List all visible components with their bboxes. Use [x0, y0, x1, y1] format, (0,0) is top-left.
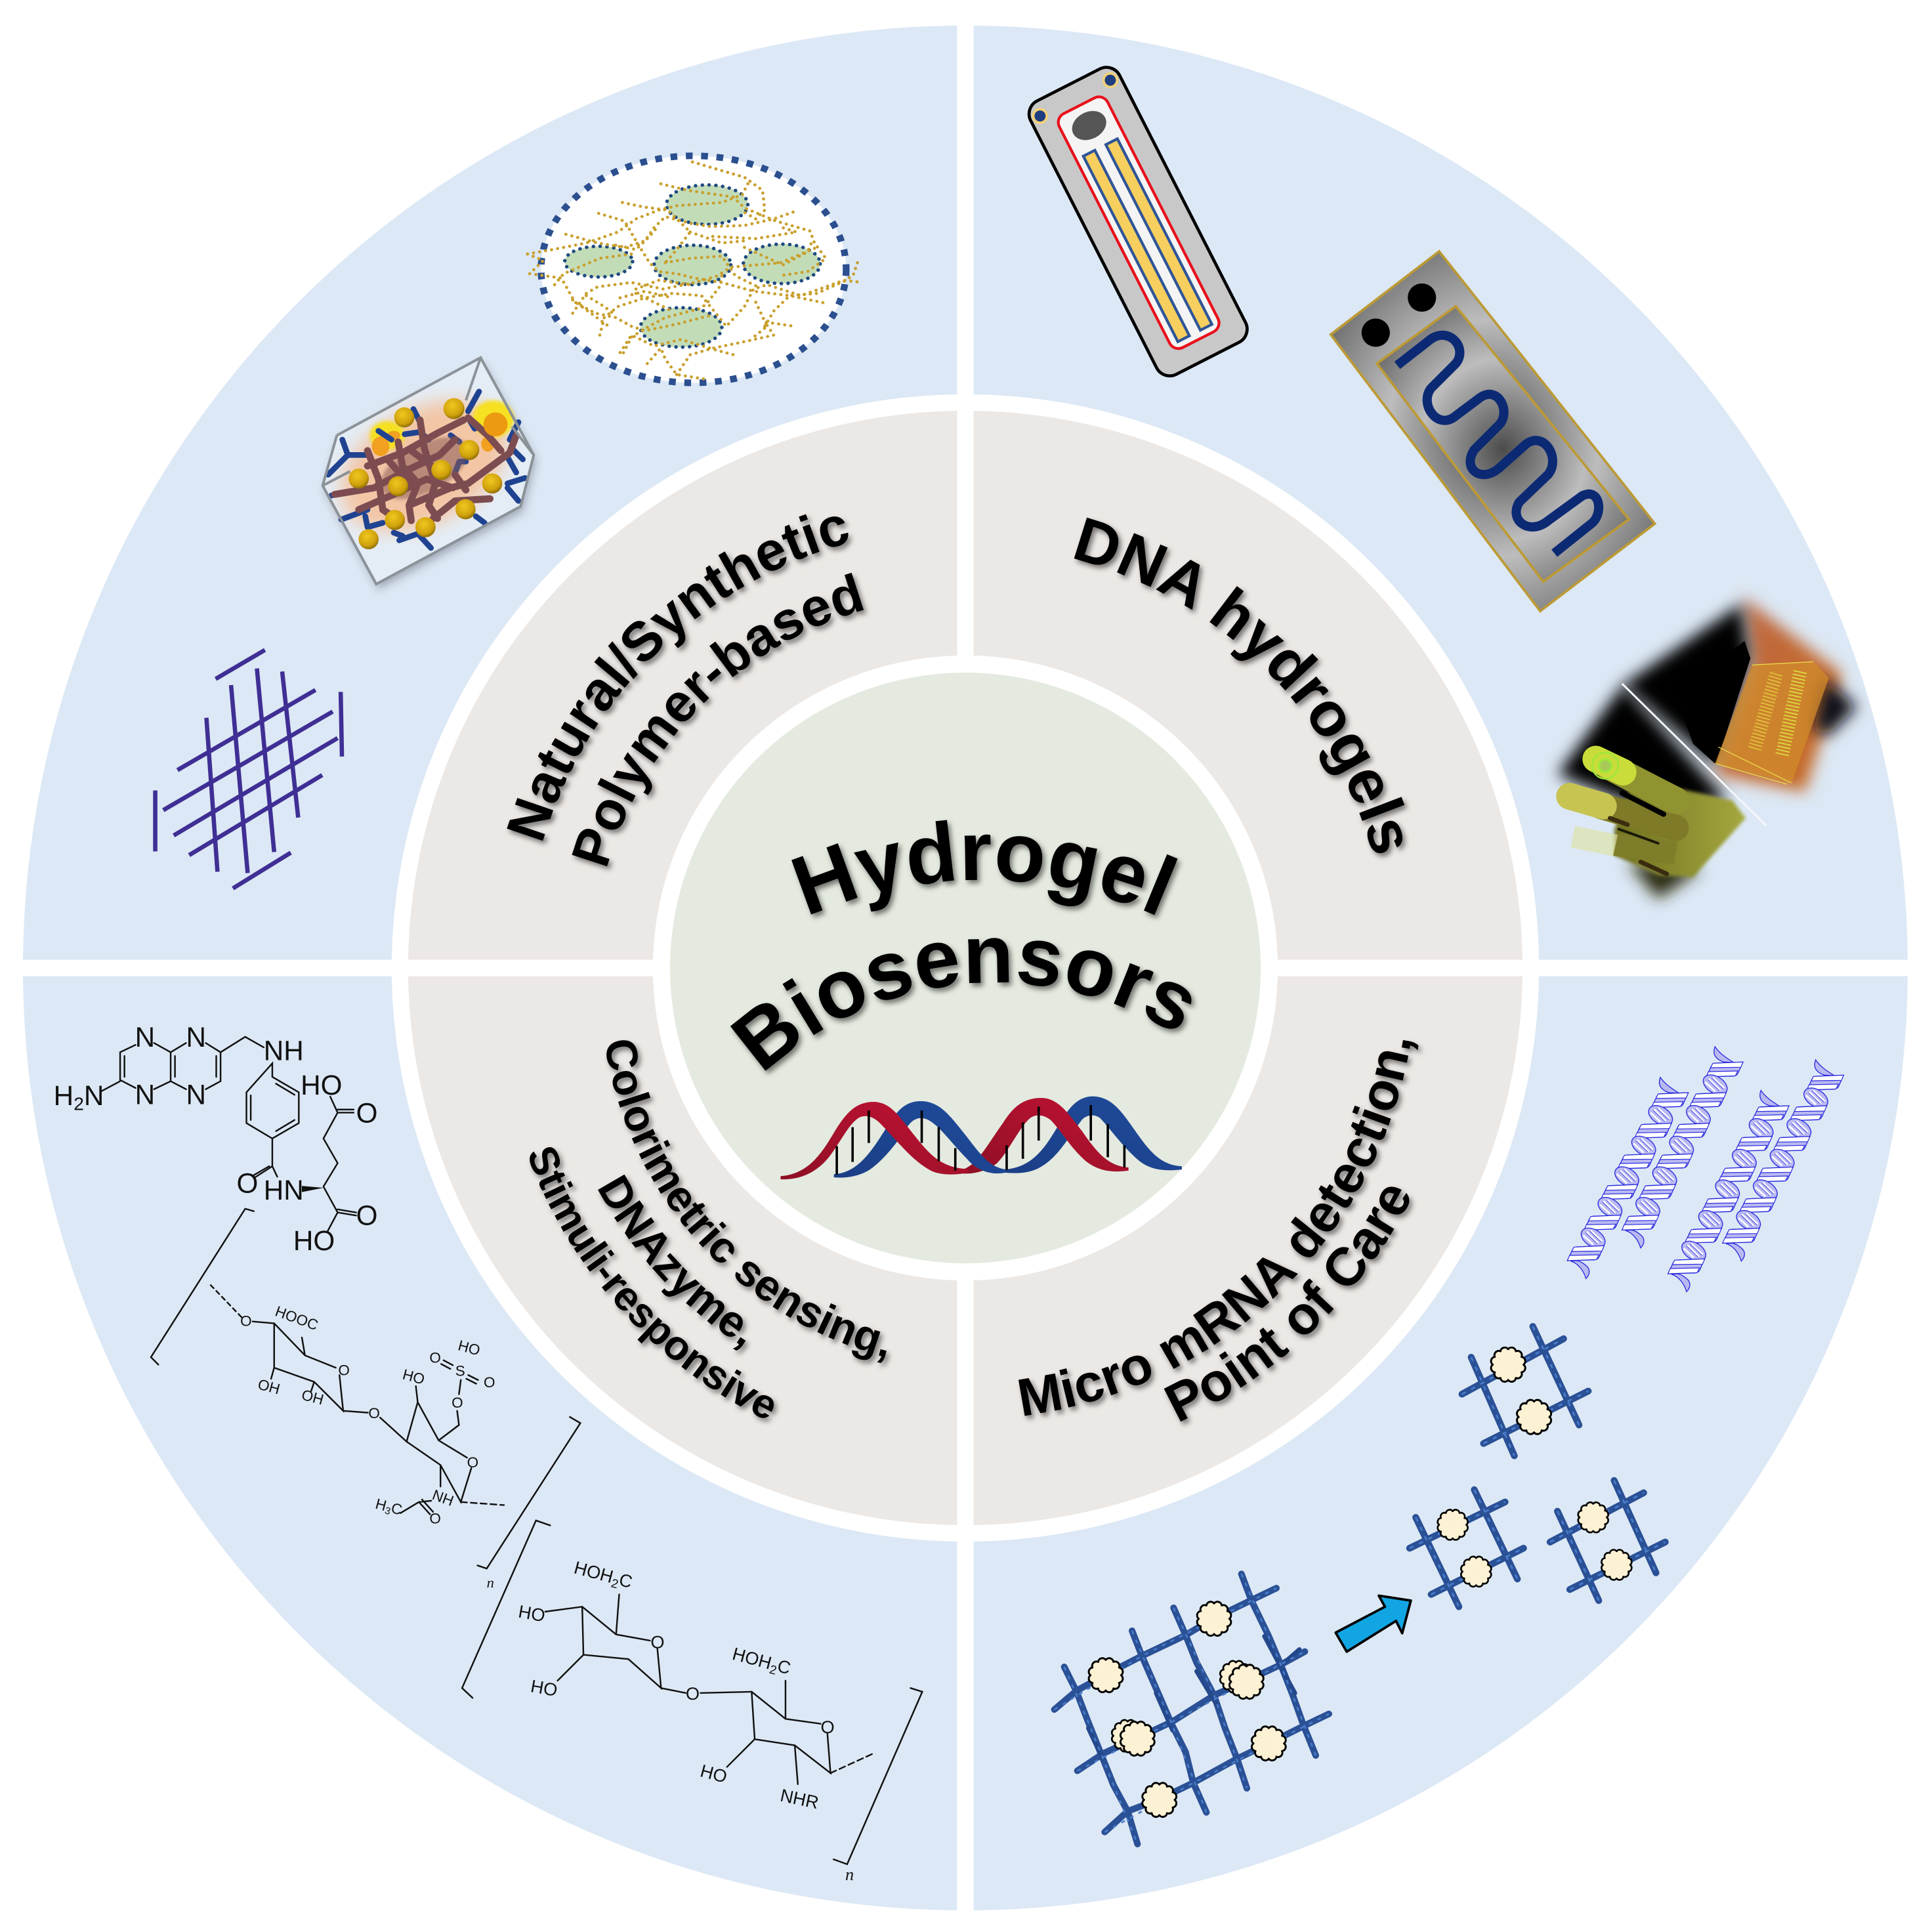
illustration: glycosaminoglycan chemical structure: HOOC	[273, 1303, 320, 1334]
illustration: folic acid chemical structure	[54, 1022, 377, 1256]
illustration: chitosan chemical structure: O	[650, 1631, 665, 1652]
illustration: chitosan chemical structure: 2	[610, 1576, 620, 1591]
illustration: folic acid chemical structure: O	[356, 1200, 377, 1230]
label: Colorimetric sensing, DNAzyme, Stimuli-responsive: DNAzyme,	[598, 1175, 751, 1356]
illustration: chitosan chemical structure: C	[617, 1569, 635, 1592]
label: Natural/Synthetic Polymer-based: Polymer-based	[572, 572, 869, 872]
arrow: lattice breakdown	[1335, 1595, 1411, 1652]
illustration: chitosan chemical structure	[462, 1521, 922, 1884]
panel: inner ring DNA hydrogels	[974, 411, 1522, 959]
illustration: glycosaminoglycan chemical structure: O	[429, 1511, 441, 1527]
illustration: serpentine electrode chip	[1331, 251, 1655, 611]
illustration: folic acid chemical structure: O	[356, 1097, 377, 1128]
label: Micro mRNA detection, Point of Care: Point of Care	[1164, 1186, 1415, 1427]
label: Colorimetric sensing, DNAzyme, Stimuli-responsive: Stimuli-responsive	[529, 1147, 780, 1425]
illustration: blue DNA double strands	[1567, 1047, 1843, 1292]
panel: central circle	[670, 673, 1261, 1263]
panel: inner ring natural synthetic polymer	[408, 411, 957, 959]
illustration: folic acid chemical structure: O	[236, 1167, 258, 1198]
illustration: folic acid chemical structure: N	[135, 1022, 155, 1053]
label: Natural/Synthetic Polymer-based: Natural/Synthetic	[507, 514, 854, 847]
illustration: glycosaminoglycan chemical structure: O	[429, 1350, 441, 1366]
illustration: chitosan chemical structure: HO	[517, 1601, 547, 1626]
illustration: glycosaminoglycan chemical structure: OH	[256, 1376, 282, 1398]
illustration: glycosaminoglycan chemical structure: H	[373, 1496, 388, 1514]
illustration: glycosaminoglycan chemical structure: n	[487, 1574, 494, 1591]
icon: DNA double helix	[781, 1098, 1182, 1178]
illustration: dotted micelle network circle	[528, 156, 862, 383]
illustration: glycosaminoglycan chemical structure: O	[368, 1405, 380, 1421]
illustration: chitosan chemical structure: 2	[768, 1662, 778, 1677]
illustration: glycosaminoglycan chemical structure: O	[338, 1362, 350, 1378]
panel: inner ring micro mRNA	[974, 976, 1522, 1525]
label: Micro mRNA detection, Point of Care: Micro mRNA detection,	[1018, 1040, 1424, 1422]
illustration: folic acid chemical structure: N	[135, 1079, 155, 1110]
illustration: glycosaminoglycan chemical structure: 3	[383, 1505, 392, 1517]
illustration: glycosaminoglycan chemical structure: O	[484, 1374, 495, 1391]
illustration: glycosaminoglycan chemical structure: C	[389, 1500, 404, 1519]
illustration: glycosaminoglycan chemical structure: HO	[456, 1337, 482, 1358]
panel: mRNA and point of care quadrant background	[974, 976, 1908, 1910]
illustration: chitosan chemical structure: HO	[529, 1675, 559, 1700]
title: Hydrogel Biosensors	[730, 820, 1197, 1076]
illustration: chitosan chemical structure: C	[775, 1655, 793, 1678]
illustration: chitosan chemical structure: HOH	[572, 1557, 616, 1587]
illustration: folic acid chemical structure: N	[186, 1079, 206, 1110]
illustration: folic acid chemical structure: N	[84, 1080, 104, 1111]
panel: DNA hydrogel devices quadrant background	[974, 26, 1908, 959]
illustration: chitosan chemical structure: O	[820, 1717, 835, 1737]
illustration: small hydrogel lattice top	[1462, 1326, 1588, 1456]
illustration: chitosan chemical structure: HOH	[730, 1643, 774, 1673]
illustration: folic acid chemical structure: HO	[293, 1225, 335, 1256]
illustration: large hydrogel lattice with cargo	[1055, 1574, 1329, 1844]
title: Hydrogel Biosensors: Biosensors	[730, 938, 1197, 1076]
label: DNA hydrogels: DNA hydrogels	[1074, 517, 1410, 860]
illustration: chitosan chemical structure: O	[686, 1683, 700, 1704]
panel: polymer materials quadrant background	[23, 26, 957, 959]
illustration: gray electrode strip sensor	[1024, 62, 1252, 381]
illustration: folic acid chemical structure: H	[54, 1080, 74, 1111]
illustration: glycosaminoglycan chemical structure: O	[467, 1454, 478, 1471]
illustration: folic acid chemical structure: HN	[264, 1175, 304, 1206]
label: Colorimetric sensing, DNAzyme, Stimuli-responsive	[529, 1040, 892, 1425]
illustration: glycosaminoglycan chemical structure: HO	[401, 1366, 427, 1388]
illustration: folic acid chemical structure: 2	[74, 1094, 84, 1114]
illustration: folic acid chemical structure: N	[186, 1022, 206, 1053]
illustration: folic acid chemical structure: HO	[301, 1070, 342, 1101]
illustration: chitosan chemical structure: HO	[698, 1760, 729, 1787]
illustration: small hydrogel lattice middle	[1410, 1490, 1524, 1606]
panel: chemical structures quadrant background	[23, 976, 957, 1910]
illustration: purple crosslinked grid	[156, 650, 342, 889]
illustration: hydrogel cube with gold nanoparticles	[318, 358, 534, 584]
illustration: chitosan chemical structure: NHR	[778, 1785, 820, 1813]
illustration: glycosaminoglycan chemical structure: OH	[300, 1387, 326, 1408]
illustration: glycosaminoglycan chemical structure: O	[240, 1312, 252, 1329]
illustration: glycosaminoglycan chemical structure: O	[452, 1395, 463, 1411]
illustration: chitosan chemical structure: n	[845, 1865, 854, 1884]
label: Colorimetric sensing, DNAzyme, Stimuli-responsive: Colorimetric sensing,	[606, 1040, 892, 1369]
illustration: small hydrogel lattice right	[1550, 1480, 1666, 1601]
illustration: glycosaminoglycan chemical structure: NH	[430, 1486, 456, 1509]
illustration: folic acid chemical structure: NH	[264, 1036, 304, 1066]
illustration: wearable sensor photo on glove and arm	[1557, 597, 1857, 899]
title: Hydrogel Biosensors: Hydrogel	[791, 820, 1183, 921]
illustration: glycosaminoglycan chemical structure	[151, 1209, 580, 1591]
panel: inner ring colorimetric sensing	[408, 976, 957, 1525]
illustration: glycosaminoglycan chemical structure: S	[455, 1362, 465, 1379]
